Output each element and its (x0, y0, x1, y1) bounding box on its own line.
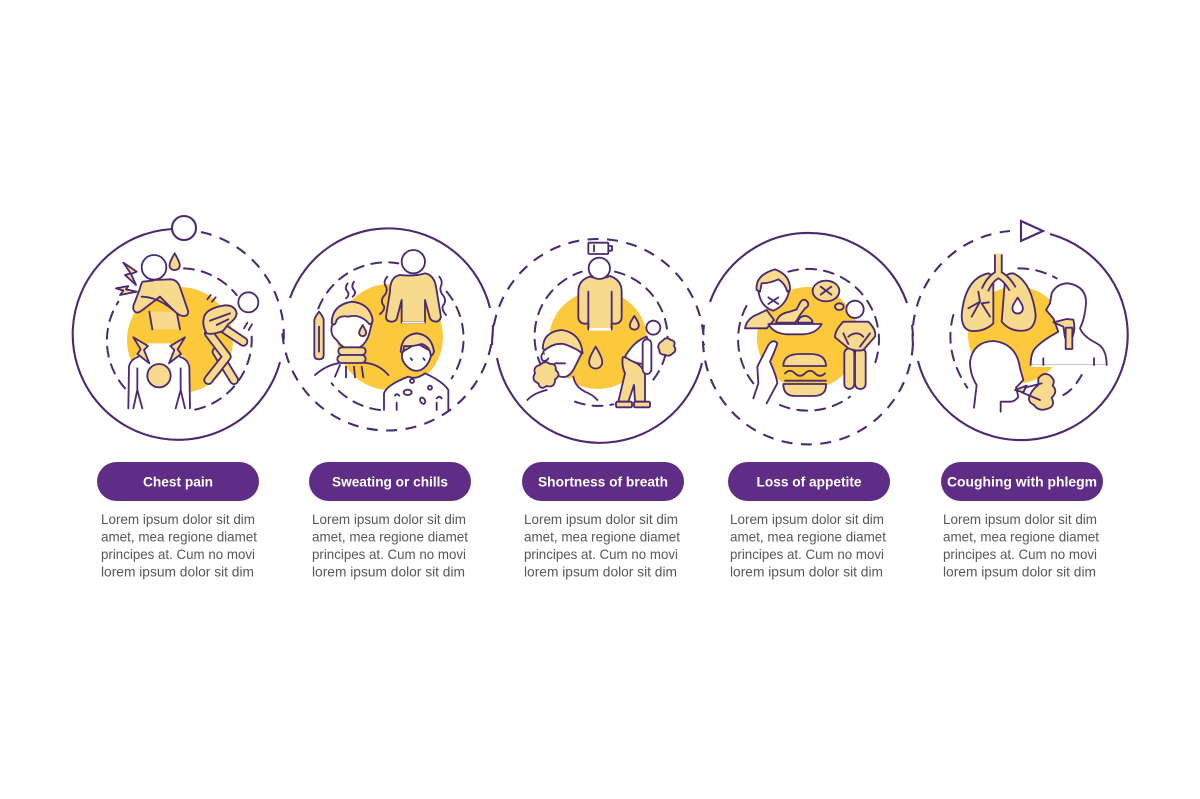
panel: sweating or chills (282, 228, 493, 430)
text block: shortness of breath: principes at. Cum no movi (524, 546, 678, 562)
text block: coughing with phlegm: principes at. Cum no movi (943, 546, 1097, 562)
outer ring (703, 233, 913, 444)
panel: coughing with phlegm (913, 221, 1128, 440)
label: shortness of breath: Shortness of breath (538, 474, 668, 490)
panel: loss of appetite (703, 233, 913, 444)
yellow disc (968, 286, 1065, 384)
shortness of breath illustration (527, 243, 675, 407)
yellow disc (549, 291, 647, 389)
outer ring (282, 228, 493, 430)
loss of appetite illustration (738, 269, 879, 411)
text block: loss of appetite: lorem ipsum dolor sit dim (730, 564, 883, 580)
text block: chest pain: amet, mea regione diamet (101, 528, 257, 544)
yellow disc (127, 287, 233, 393)
outer ring with start marker (73, 216, 284, 440)
label: loss of appetite (728, 462, 890, 501)
sweating illustration (314, 250, 464, 410)
outer ring with end arrow (913, 221, 1128, 440)
text block: loss of appetite: amet, mea regione diamet (730, 528, 886, 544)
label: chest pain: Chest pain (143, 474, 213, 490)
text block: sweating or chills: amet, mea regione diamet (312, 528, 468, 544)
text block: loss of appetite: Lorem ipsum dolor sit dim (730, 511, 884, 527)
yellow disc (337, 284, 443, 390)
label: shortness of breath (522, 462, 684, 501)
yellow disc (757, 287, 859, 389)
outer ring (492, 239, 704, 443)
text block: coughing with phlegm: Lorem ipsum dolor sit dim (943, 511, 1097, 527)
text block: shortness of breath: Lorem ipsum dolor sit dim (524, 511, 678, 527)
text block: sweating or chills: Lorem ipsum dolor sit dim (312, 511, 466, 527)
text block: chest pain: Lorem ipsum dolor sit dim (101, 511, 255, 527)
text block: chest pain (101, 511, 257, 580)
panel: chest pain (73, 216, 284, 440)
label: chest pain (97, 462, 259, 501)
text block: coughing with phlegm (943, 511, 1099, 580)
text block: chest pain: lorem ipsum dolor sit dim (101, 564, 254, 580)
panel: shortness of breath (492, 239, 704, 443)
text block: shortness of breath: amet, mea regione diamet (524, 528, 680, 544)
text block: shortness of breath (524, 511, 680, 580)
coughing illustration (950, 253, 1107, 412)
chest pain illustration (107, 253, 258, 410)
text block: chest pain: principes at. Cum no movi (101, 546, 255, 562)
text block: sweating or chills: lorem ipsum dolor sit dim (312, 564, 465, 580)
label: sweating or chills (309, 462, 471, 501)
text block: sweating or chills: principes at. Cum no movi (312, 546, 466, 562)
label: sweating or chills: Sweating or chills (332, 474, 448, 490)
text block: sweating or chills (312, 511, 468, 580)
text block: coughing with phlegm: amet, mea regione diamet (943, 528, 1099, 544)
label: coughing with phlegm: Coughing with phlegm (947, 474, 1097, 490)
label: loss of appetite: Loss of appetite (756, 474, 862, 490)
text block: loss of appetite (730, 511, 886, 580)
label: coughing with phlegm (941, 462, 1103, 501)
text block: shortness of breath: lorem ipsum dolor sit dim (524, 564, 677, 580)
text block: coughing with phlegm: lorem ipsum dolor sit dim (943, 564, 1096, 580)
text block: loss of appetite: principes at. Cum no movi (730, 546, 884, 562)
